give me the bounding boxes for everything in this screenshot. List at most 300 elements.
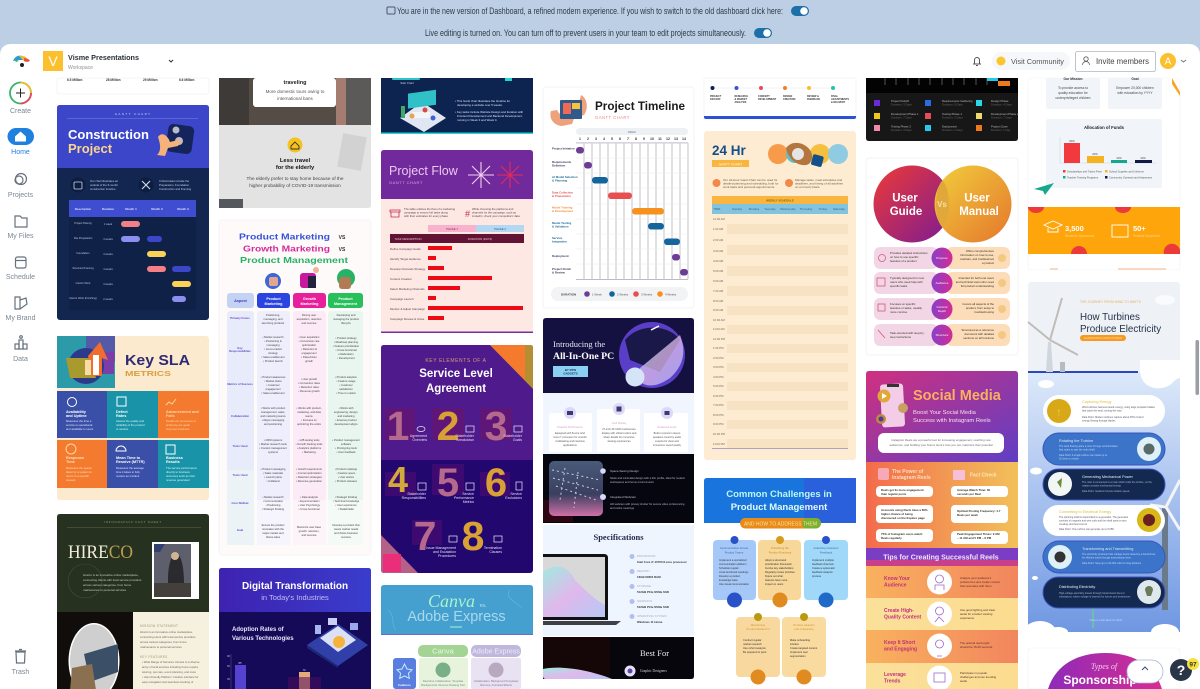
numbered elements: 7 [414, 513, 436, 559]
nav: my files [7, 216, 34, 240]
gantt chart: 6 [619, 137, 621, 141]
comparison rows: step instructions [890, 335, 911, 339]
gantt chart: WEEK [628, 130, 636, 134]
element labels: Issue Management [426, 546, 456, 550]
intro notes: channels for the campaign, such as [472, 210, 517, 214]
challenge cards row 1: Communication Across [720, 546, 749, 550]
table cell text: • Time to market [336, 391, 356, 395]
schedule table: 8:00 AM [713, 299, 724, 303]
keyboard section: Sleek and minimalist design with a thin profile, ideal for modern [610, 476, 686, 480]
challenge cards row 1: Develop a product [719, 574, 740, 578]
table cell text: systems [268, 450, 279, 454]
table cell text: • Market research tools [259, 442, 287, 446]
table cell text: • Sales enablement [261, 391, 285, 395]
bar chart: adoption rates: 85 [238, 661, 242, 665]
step pills: Transforming and Transmitting [1082, 547, 1133, 551]
gantt chart: 11 [658, 137, 662, 141]
gantt chart: Project Initiation [552, 146, 575, 150]
numbered elements [385, 403, 512, 559]
comparison rows: specific tasks [890, 284, 908, 288]
table cell text: • Positioning & [264, 339, 282, 343]
lower right: mission text: MISSION STATEMENT [140, 624, 178, 628]
metric tiles: Measures the average [116, 466, 144, 470]
feature cards: experts for clear and [655, 439, 679, 443]
stats section: Peak Engagement Times: 9 AM [957, 532, 1000, 536]
challenge cards row 2: Implement user [790, 650, 808, 654]
card: service level agreement: Service Level [419, 368, 493, 380]
card: HireCo infographic fact sheet [57, 514, 209, 689]
gantt table: Duration [102, 207, 114, 211]
schedule table: 1:00 AM [713, 227, 724, 231]
element labels: Performance [454, 496, 474, 500]
goal boxes: Empower 20,000 children [1116, 86, 1154, 90]
gantt chart: TASK DESCRIPTION [394, 237, 422, 241]
table cell text: • Customer [339, 383, 353, 387]
table cell text: • Market research [262, 335, 284, 339]
keyboard section [543, 454, 694, 523]
challenge cards row 2 [736, 613, 826, 684]
gantt chart: Data Collection [552, 190, 573, 194]
numbered elements: 1 [387, 403, 409, 449]
step pills: The rotor is connected to a main shaft inside the turbine, so the [1082, 481, 1153, 484]
tips rows: and Engaging [884, 646, 917, 652]
feature cards: Equipped with 8-core Intel [555, 431, 585, 435]
element labels: and Escalation [433, 550, 456, 554]
bar chart: adoption rates [227, 654, 321, 689]
table cell text: • Focuses on [301, 418, 317, 422]
table cell text: Ensure the product [262, 523, 285, 527]
description bullets: • This Gantt chart illustrates the timeline for [455, 99, 510, 103]
lower right: mission text: HireCo's an innovative online marketplace, [140, 630, 193, 634]
card: travel photo infographic: for the elderly [276, 165, 315, 171]
gantt chart: 4 [603, 137, 605, 141]
illustration: isometric office [400, 90, 446, 132]
schedule table: 7:00 AM [713, 289, 724, 293]
card: timeline steps strip: KICKOFF [710, 98, 721, 101]
card: HireCo infographic fact sheet: HireCo is an innovative online marketplace, [83, 573, 139, 577]
comparison rows: users who need help with [890, 280, 923, 284]
schedule table: 3:00 AM [713, 249, 724, 253]
gantt table: Foundation [77, 251, 90, 255]
comparison rows: Audience [935, 281, 949, 285]
metric tiles: Advancement and [166, 410, 199, 414]
comparison table: Canva [432, 646, 455, 656]
metric tiles: achieving set goals [166, 423, 190, 427]
schedule table: 1:00 PM [713, 346, 724, 350]
challenge cards row 1: Prioritizing the [771, 546, 789, 550]
gantt table: Month 1 [125, 207, 137, 211]
metric tiles: and available to users [66, 427, 94, 431]
table cell text: • Conversion rate [299, 339, 320, 343]
gantt chart: & Review [552, 270, 566, 274]
challenge cards row 1: Adopt a structured [765, 558, 787, 562]
table row labels: Tools Used [233, 444, 248, 448]
numbered elements: 2 [437, 403, 459, 449]
callout: traveling: More domestic tours owing to [266, 89, 325, 94]
tips rows: Keep It Short [884, 640, 915, 646]
schedule table: 10:00 PM [713, 432, 726, 436]
hero section: GADGETS [563, 372, 578, 376]
challenge cards row 1: Involve key stakeholders [765, 566, 794, 570]
heading: Project Timeline [595, 101, 685, 113]
table cell text: • Revenue growth [298, 389, 320, 393]
table cell text: • User acquisition [299, 335, 320, 339]
tips rows: challenges and use trending [960, 675, 997, 679]
element labels: Breakdown [456, 438, 474, 442]
specifications section: 512GB PCIe NVMe SSD [637, 590, 669, 594]
table cell text: • Content management [259, 446, 287, 450]
table column headers: Marketing [265, 302, 283, 306]
lower right: mission text: maintenance to personal services [140, 645, 182, 649]
bar chart: allocation of funds: Scholarships and Tuition Fees [1067, 170, 1102, 174]
metric tiles: Business [166, 456, 183, 460]
description bullets: developing a website over 5 weeks. [457, 103, 503, 107]
table cell text: • Strategic thinking [262, 507, 285, 511]
table column headers [227, 293, 363, 308]
metric tiles: Defect [116, 410, 128, 414]
feature cards: applications [563, 443, 578, 447]
card: HireCo infographic fact sheet: across various categories, from home [83, 583, 132, 587]
gantt chart: Select Marketing Channels [390, 287, 425, 291]
table cell text: • Cross-functional [298, 507, 320, 511]
venn diagram: User [964, 192, 990, 204]
gantt table: 2 weeks [103, 297, 113, 301]
legend: 1 Week [592, 292, 602, 296]
icon: paper plane [1034, 183, 1054, 195]
keyboard section: HD webcam with privacy shutter for secure video conferencing [610, 502, 685, 506]
lower left: oval laptop photo [57, 612, 133, 689]
metric tiles: Fails [166, 414, 175, 418]
card: common challenges in product management: Product Management [731, 502, 828, 513]
challenge cards row 2: segmentation [790, 654, 806, 658]
card: dark gantt legend: Duration: 2 Days [942, 128, 963, 132]
step pills: that rotate to spin the main shaft [1059, 448, 1095, 452]
tips heading: Tips for Creating Successful Reels [883, 554, 999, 562]
schedule table: Friday [819, 207, 828, 211]
tips rows: The optimal reel length [960, 641, 990, 645]
step pills: Data Point: A single turbine can rotate up to [1059, 454, 1108, 457]
metric tiles: Availability [66, 410, 87, 414]
table cell text: • A/B testing tools [299, 438, 320, 442]
heading: HIRECO [68, 542, 133, 563]
table cell text: • Product messaging [261, 467, 286, 471]
heading: 24 Hr [712, 143, 747, 158]
table column headers: Management [334, 302, 358, 306]
card: dark gantt legend: Duration: 7 Days [891, 116, 912, 120]
challenge cards row 1: knowledge base [719, 578, 738, 582]
banner message: live editing: Live editing is turned on. You can turn off to prevent users in your team to edit projects simultaneously. [425, 28, 746, 38]
comparison rows: Purpose [936, 256, 948, 260]
legend: 2 Weeks [617, 292, 629, 296]
table cell text: engagement [302, 351, 317, 355]
nav: create [10, 82, 31, 115]
table cell text: • Sales materials [263, 471, 284, 475]
best for section: Best For [640, 648, 669, 658]
stats section: Reels regularly [881, 536, 902, 540]
table cell text: • User growth [301, 377, 318, 381]
legend [551, 287, 688, 301]
challenge cards row 1: Create a systematic [812, 566, 836, 570]
description icons and text: construction timeline [90, 187, 116, 191]
tips rows: Create High- [884, 608, 914, 614]
card: dark gantt legend: Deployment [942, 124, 957, 128]
table cell text: messaging [266, 343, 280, 347]
step pills: Rotating the Turbine [1059, 439, 1093, 443]
help button [1170, 658, 1199, 681]
intro notes: LinkedIn, check your competitors' data [472, 214, 520, 218]
impact band: 50+ [1133, 224, 1146, 233]
metric tiles: Assess the quality and [116, 419, 144, 423]
user avatar [1160, 53, 1186, 69]
help button: 97 [1189, 662, 1197, 668]
gantt table: Interior Work [76, 281, 91, 285]
table cell text: • Technical knowledge [333, 499, 360, 503]
gantt table [69, 200, 196, 310]
numbered elements: 6 [485, 461, 507, 505]
card: dark gantt legend: Duration: 1 Day [991, 128, 1011, 132]
card: dark gantt legend: Development Phase 1 [891, 112, 919, 116]
challenge cards row 1: Product Teams [725, 550, 744, 554]
bar chart: allocation of funds [1046, 119, 1162, 188]
schedule table: 11:00 AM [713, 327, 725, 331]
comparison rows: Intended for both end users [959, 276, 995, 280]
table cell text: • Aligns messaging [262, 418, 285, 422]
table cell text: • Experimentation [298, 499, 320, 503]
table cell text: acquisition, retention [297, 317, 322, 321]
challenge cards row 2: Maintaining [751, 623, 766, 627]
gantt table: Month 2 [151, 207, 163, 211]
feature cards: Powerful Performance [557, 425, 583, 429]
challenge cards row 1: Use visual communication [719, 582, 750, 586]
table row labels: Goal [237, 528, 243, 532]
lower right: mission text: easy navigation and seamless booking of [142, 680, 193, 684]
table row labels [227, 316, 253, 532]
card: digital transformation: in Today's Industries [261, 593, 329, 602]
card: dark gantt legend: Duration: 7 Days [991, 116, 1012, 120]
card: dark gantt legend: Project Kickoff [891, 99, 909, 103]
card: travel photo infographic: higher probability of COVID-19 transmission [249, 183, 341, 188]
table cell text: • Launch plans [264, 475, 282, 479]
step pills: The electricity produced has voltage levels raised by a transformer [1082, 553, 1156, 556]
schedule table: 5:00 PM [713, 384, 724, 388]
table cell text: • User stories [338, 475, 355, 479]
header section: Instagram Reels are a powerful tool for increasing engagement, reaching new [891, 438, 992, 442]
illustration: circles and stopwatch hand [768, 143, 848, 167]
comparison rows: Focuses on specific [890, 302, 916, 306]
tips rows: should be 15-30 seconds [960, 645, 993, 649]
description icons and text: Critical tasks include the [159, 179, 190, 183]
nav: data [13, 336, 28, 363]
keyboard section: Integrated Webcam [610, 495, 637, 499]
gantt chart: Campaign Review & Close [390, 317, 425, 321]
intro notes: # [465, 209, 470, 219]
card: project timeline gantt: GANTT CHART [595, 115, 630, 120]
table cell text: • Customer [266, 383, 280, 387]
step pills: rotation creates mechanical energy [1082, 484, 1122, 488]
gantt chart: 1 [579, 137, 581, 141]
table cell text: software [341, 442, 352, 446]
table cell text: engagement [266, 387, 281, 391]
icons: three illustrated figures [265, 267, 355, 289]
comparison rows: Depth [938, 309, 946, 313]
stats section: discovered on the Explore page [881, 516, 925, 520]
card: canva vs adobe express: Adobe Express [407, 609, 506, 625]
nav: schedule: Schedule [6, 274, 35, 281]
element labels [402, 434, 523, 558]
card: dark gantt legend: Testing Phase 2 [891, 124, 911, 128]
card: common challenges in product management: AND HOW TO ADDRESS THEM [744, 522, 817, 528]
schedule table: 9:00 PM [713, 422, 724, 426]
card: dark gantt legend: Duration: 3 Days [891, 128, 912, 132]
challenge cards row 2: and onboarding [794, 627, 814, 631]
comparison rows: features or tasks, usually [890, 306, 923, 310]
comparison rows: on how to use specific [890, 255, 919, 259]
numbered elements: 8 [462, 513, 484, 559]
tips rows: that resonates with them [960, 584, 992, 588]
card: how turbines produce electricity: How Turbines [1080, 312, 1140, 323]
icon: starbursts [468, 162, 523, 188]
keyboard section: workspaces and home environments [610, 480, 654, 484]
card: dark gantt legend: Development Phase 2 [991, 112, 1019, 116]
table cell text: • Growth hacking tools [296, 442, 323, 446]
gantt chart [390, 225, 524, 321]
card: types of sponsorship: Types of [1091, 662, 1119, 671]
element labels: Overview [412, 438, 427, 442]
nav: create: Create [10, 108, 31, 115]
table row labels: Core Skillset [232, 501, 249, 505]
bar chart: allocation of funds: 10% [1140, 156, 1146, 160]
challenge cards row 2: Make onboarding [790, 638, 811, 642]
table cell text: • Roadmap planning [334, 340, 359, 344]
gantt table: Description [75, 207, 91, 211]
specifications section: STORAGE [637, 584, 651, 588]
lower right: mission text [133, 612, 209, 689]
table cell text: • Marketing [302, 450, 316, 454]
element labels: Stakeholder [503, 434, 523, 438]
goal boxes: quality education for [1058, 91, 1089, 95]
goal boxes: To provide access to [1058, 86, 1088, 90]
lower right: mission text: connecting users with local service providers [140, 635, 196, 639]
table cell text: development aligns [334, 422, 358, 426]
comparison table: Real-time Collaboration, Template [423, 679, 464, 683]
table cell text: • Ensures product [335, 418, 357, 422]
metric tiles: Mean Time to [116, 456, 141, 460]
card: travel photo infographic: The elderly prefer to stay home because of the [247, 176, 344, 181]
heading: Digital Transformation [242, 581, 348, 592]
table row labels: Collaboration [231, 414, 249, 418]
challenge cards row 1: Implement multiple [812, 558, 834, 562]
header section: Social Media [913, 388, 1002, 404]
schedule table: 4:00 AM [713, 259, 724, 263]
schedule table: 8:00 PM [713, 413, 724, 417]
column 6 cards [866, 78, 1019, 689]
callout: traveling [253, 78, 336, 107]
table row labels: Metrics of Success [227, 382, 253, 386]
card: dark gantt legend [866, 78, 1019, 141]
card: project flow gantt: GANTT CHART [389, 180, 423, 185]
header section: Boost Your Social Media [913, 410, 977, 416]
gantt chart: Campaign Launch [390, 297, 414, 301]
comparison rows: Covers all aspects of the [962, 302, 994, 306]
gantt chart: Monitor & Adjust Campaign [390, 307, 425, 311]
callout: traveling: traveling [284, 80, 306, 86]
table cell text: messaging, and [264, 317, 283, 321]
table cell text: • Feature specs [337, 471, 356, 475]
card: travel photo infographic [219, 78, 371, 208]
card: timeline steps strip: RESEARCH [734, 95, 748, 98]
comparison rows: Structure [936, 333, 949, 337]
challenge cards row 1 [713, 536, 848, 608]
table cell text: • Product releases [335, 479, 358, 483]
card: timeline steps strip: FINAL [831, 95, 839, 98]
card: timeline steps strip: ANALYSIS [734, 101, 747, 104]
gantt table: Structural Framing [72, 266, 94, 270]
card: canva vs adobe express [381, 585, 533, 689]
comparison rows: Structured as a reference [961, 328, 994, 332]
tips rows: Use good lighting and clear [960, 608, 995, 612]
tips rows: audio [960, 679, 967, 683]
clouds [1024, 295, 1179, 643]
step pills: The wind flowing spins a rotor of huge vertical blades [1059, 445, 1119, 448]
card: construction project gantt: GANTT CHART [115, 112, 151, 116]
workspace selector: Workspace [68, 65, 93, 71]
legend: 4 Weeks [665, 292, 677, 296]
challenge cards row 2: Conduct regular [743, 638, 762, 642]
table cell text: resonates with the [262, 527, 284, 531]
metric tiles: Response [66, 456, 84, 460]
element icons [417, 426, 522, 542]
heading: KEY ELEMENTS OF A [425, 358, 487, 364]
table row labels: Responsibilities [229, 349, 251, 353]
table cell text: • Sales enablement [261, 355, 285, 359]
table cell text: • Product roadmap [335, 467, 358, 471]
column 1 cards [57, 78, 209, 689]
metric tiles [57, 391, 209, 488]
intro text: on an hourly basis. [795, 185, 820, 189]
stats section: Accounts using Reels have a 60% [881, 508, 928, 512]
element labels: Agreement [410, 434, 427, 438]
comparison table: Features [398, 683, 411, 687]
card: construction project gantt [57, 105, 209, 320]
schedule table: 5:00 AM [713, 269, 724, 273]
column 2 cards [219, 78, 371, 689]
table column headers: Product [266, 297, 281, 301]
column 7 cards [1024, 77, 1180, 689]
nav: data: Data [13, 356, 28, 363]
card: timeline steps strip: ADJUSTMENTS [831, 98, 849, 101]
card: timeline steps strip: CONCEPT [758, 95, 770, 98]
goal boxes: Our Mission [1063, 77, 1083, 81]
intro notes: The table outlines the flow of a marketing [404, 207, 455, 211]
card: statistics stub: 6.5 Million [67, 78, 82, 82]
schedule table: 4:00 PM [713, 375, 724, 379]
impact band: Students Sponsored [1065, 234, 1094, 238]
nav: home [8, 128, 34, 156]
table cell text: optimizing the entire [297, 422, 322, 426]
stats section: Reels per week [957, 513, 978, 517]
schedule table: 3:00 PM [713, 365, 724, 369]
keyboard section: and online meetings [610, 506, 635, 510]
gantt chart: Identify Target Audience [390, 257, 421, 261]
card: key SLA metrics: METRICS [125, 369, 171, 378]
feature cards: multitasking and intensive [555, 439, 585, 443]
tips rows: Quality Content [884, 614, 922, 620]
table cell text: management, sales, [261, 410, 285, 414]
table cell text: Driving user [302, 313, 316, 317]
invite members button [1076, 52, 1156, 72]
intro text: deadlines, and timing of all activities [795, 182, 843, 186]
feature cards [543, 393, 694, 454]
